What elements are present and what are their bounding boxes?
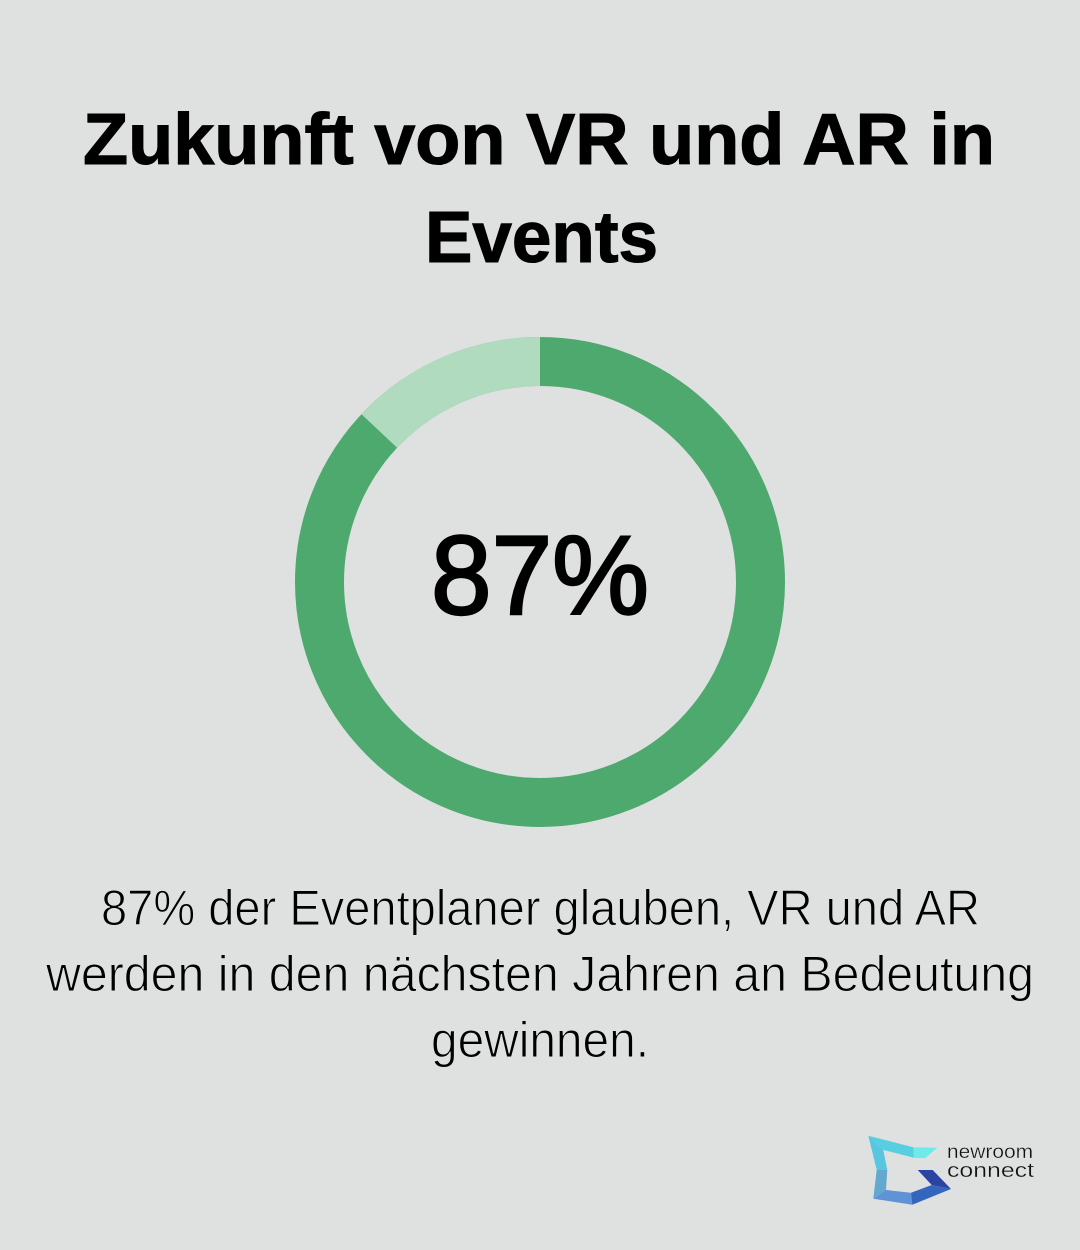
title: Zukunft von VR und AR in (83, 100, 995, 180)
description text: gewinnen. (431, 1012, 649, 1068)
logo: newroom connect (868, 1136, 1035, 1205)
logo wordmark (947, 1142, 1035, 1182)
title: Events (425, 198, 658, 278)
description text: 87% der Eventplaner glauben, VR und AR (101, 880, 980, 936)
donut value: 87% (431, 513, 649, 638)
donut chart: 87 percent (320, 362, 760, 802)
logo icon (868, 1136, 951, 1205)
logo wordmark: connect (947, 1160, 1035, 1182)
description text (45, 880, 1034, 1068)
title (83, 100, 995, 278)
logo wordmark: newroom (947, 1142, 1033, 1163)
description text: werden in den nächsten Jahren an Bedeutung (45, 946, 1034, 1002)
